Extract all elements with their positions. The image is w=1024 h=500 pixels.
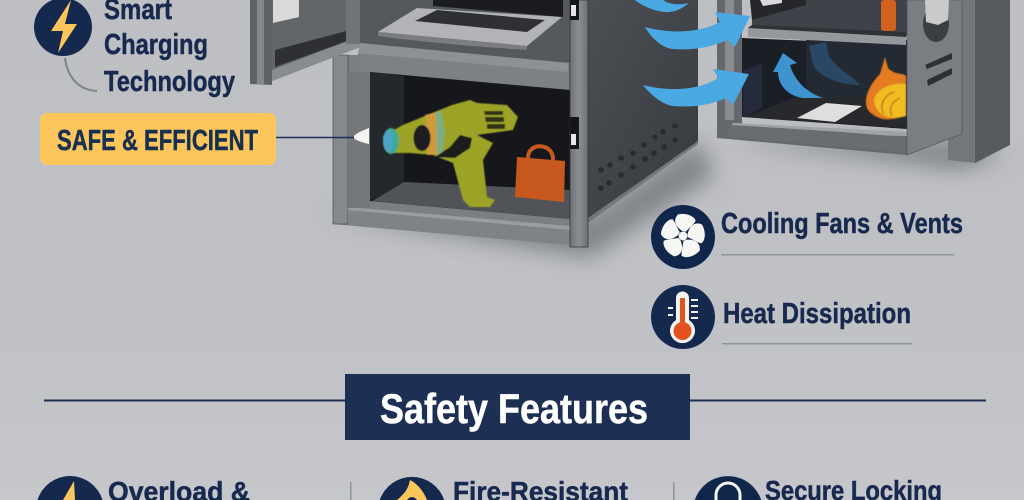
orange bottle — [881, 0, 896, 31]
left charging cabinet — [250, 0, 698, 247]
vent holes — [598, 123, 678, 191]
open door — [250, 0, 360, 85]
upper device — [750, 0, 806, 20]
feature: secure locking — [695, 475, 942, 500]
latches — [570, 0, 579, 149]
lower compartment — [370, 72, 570, 219]
callout: safe and efficient: SAFE & EFFICIENT — [57, 125, 258, 157]
upper compartment — [360, 0, 570, 63]
floor shadows — [325, 140, 1005, 258]
left wall device — [743, 63, 762, 117]
phone on floor — [797, 103, 862, 122]
heading: smart charging technology: Charging — [104, 29, 208, 61]
divider — [350, 482, 352, 500]
side vents — [925, 53, 952, 86]
back column — [948, 0, 975, 163]
thermometer icon — [651, 285, 715, 349]
compartment header — [358, 53, 568, 90]
front post — [907, 0, 962, 155]
drill — [383, 100, 518, 207]
right post — [570, 0, 588, 247]
icon: smart charging — [34, 0, 97, 91]
heading: heat dissipation: Heat Dissipation — [723, 298, 911, 330]
feature: overload protection — [38, 476, 250, 500]
heading: smart charging technology — [104, 0, 235, 98]
inner airflow arrows — [773, 53, 823, 98]
cabinet side panel — [588, 0, 698, 220]
heading: cooling fans and vents: Cooling Fans & Vents — [721, 208, 963, 240]
label on shelf — [760, 0, 782, 6]
callout: safe and efficient — [40, 113, 369, 165]
right cooling cabinet — [717, 0, 1010, 163]
frame — [717, 0, 907, 155]
divider — [673, 482, 674, 500]
cabinet body frame — [333, 55, 570, 245]
laptop — [378, 0, 563, 50]
lower frame — [728, 123, 906, 153]
lower frame — [348, 207, 570, 245]
section title: safety features: Safety Features — [380, 385, 648, 432]
latch — [923, 0, 949, 42]
fan icon — [651, 205, 715, 269]
flame — [866, 57, 906, 119]
shelf — [748, 28, 906, 45]
heading: smart charging technology: Technology — [104, 66, 235, 98]
airflow arrows — [635, 0, 750, 106]
orange bag — [515, 146, 565, 202]
interior — [742, 38, 907, 129]
section title: safety features — [44, 374, 986, 440]
feature: fire-resistant — [380, 476, 628, 500]
